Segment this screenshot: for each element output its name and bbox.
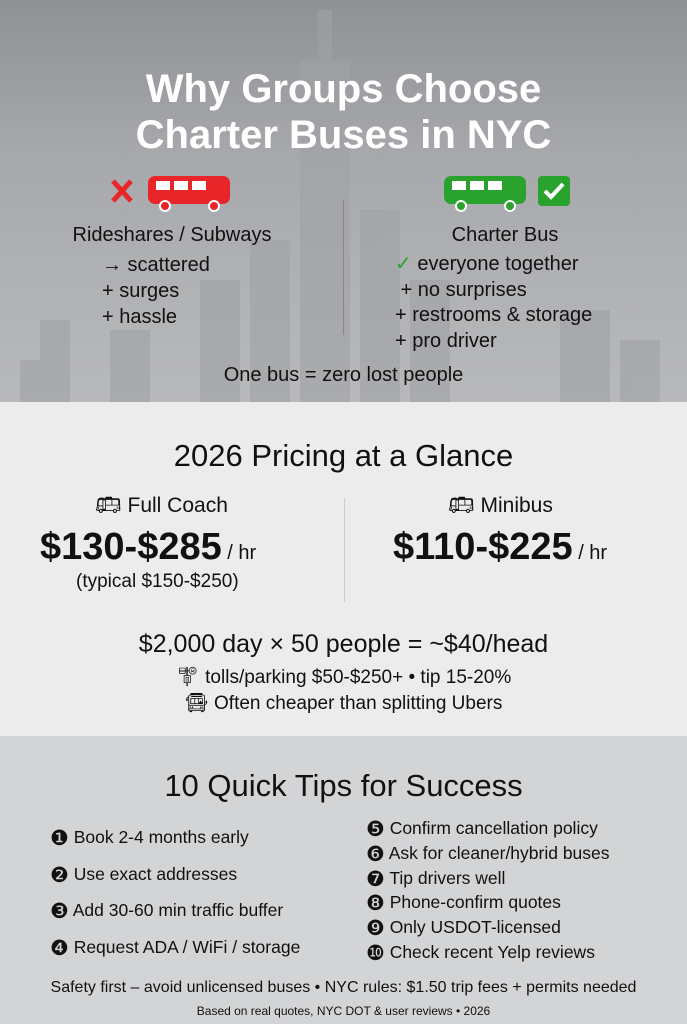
panel: pricing [0, 402, 687, 736]
text: charter column [395, 224, 592, 352]
icon: green bus and check [444, 176, 570, 212]
list: tips 1-4: ❶ Book 2-4 months early [50, 827, 249, 850]
text: rideshares column: + surges [102, 280, 179, 302]
text: charter column: ✓ everyone together [395, 253, 579, 275]
text: cost example: 🚍︎ Often cheaper than splitting Ubers [185, 693, 502, 714]
block: full coach: $130-$285 / hr [40, 526, 256, 568]
text: charter column: + restrooms & storage [395, 304, 592, 326]
footer: safety: Safety first – avoid unlicensed buses • NYC rules: $1.50 trip fees + permits needed [51, 979, 636, 996]
panel: tips [0, 736, 687, 1024]
list: tips 1-4: ❸ Add 30-60 min traffic buffer [50, 900, 283, 923]
text: cost example [139, 630, 548, 714]
text: tagline: One bus = zero lost people [224, 364, 463, 386]
text: cost example: $2,000 day × 50 people = ~$40/head [139, 630, 548, 658]
block: minibus: 🚌︎ Minibus [448, 494, 553, 517]
title: Charter Buses in NYC [136, 113, 551, 157]
text: charter column: + pro driver [395, 330, 497, 352]
text: cost example: 🚏︎ tolls/parking $50-$250+ • tip 15-20% [176, 667, 511, 688]
text: rideshares column [72, 224, 271, 328]
block: minibus: $110-$225 / hr [393, 526, 607, 568]
icon: red X and bus [111, 176, 230, 212]
text: rideshares column: + hassle [102, 306, 177, 328]
block: minibus [393, 494, 607, 568]
footer: source: Based on real quotes, NYC DOT & user reviews • 2026 [197, 1004, 490, 1018]
list: tips 5-10: ❻ Ask for cleaner/hybrid buses [366, 843, 610, 866]
list: tips 5-10: ❼ Tip drivers well [366, 868, 505, 891]
list: tips 5-10: ❾ Only USDOT-licensed [366, 917, 561, 940]
list: tips 1-4: ❹ Request ADA / WiFi / storage [50, 936, 300, 960]
title: Why Groups Choose [146, 67, 541, 111]
text: charter column: Charter Bus [452, 224, 558, 246]
list: tips 5-10: ❽ Phone-confirm quotes [366, 892, 561, 915]
heading: pricing: 2026 Pricing at a Glance [174, 438, 513, 473]
text: rideshares column: Rideshares / Subways [72, 224, 271, 246]
list: tips 5-10: ❿ Check recent Yelp reviews [366, 942, 595, 965]
block: full coach: 🚌︎ Full Coach [95, 494, 228, 517]
heading: tips: 10 Quick Tips for Success [164, 768, 523, 803]
title [136, 67, 551, 157]
list: tips 5-10: ❺ Confirm cancellation policy [366, 818, 598, 841]
text: charter column: + no surprises [401, 278, 527, 300]
list: tips 1-4 [50, 827, 300, 960]
block: full coach: (typical $150-$250) [76, 571, 239, 592]
text: rideshares column: → scattered [102, 254, 210, 276]
panel: hero [0, 0, 687, 402]
list: tips 1-4: ❷ Use exact addresses [50, 864, 237, 886]
list: tips 5-10 [366, 818, 610, 965]
block: full coach [40, 494, 256, 592]
